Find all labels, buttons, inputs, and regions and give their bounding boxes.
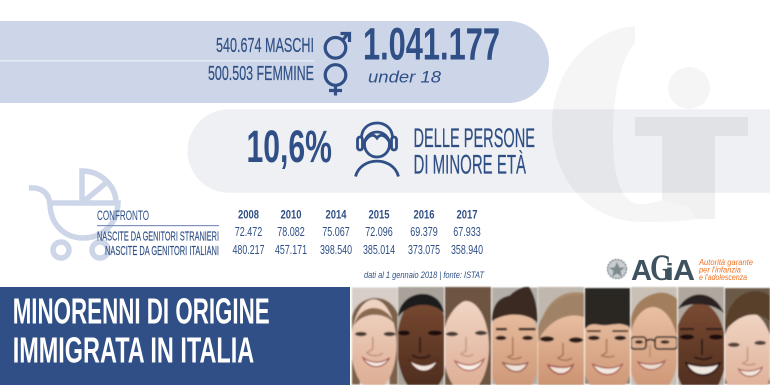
foreign-parent births values: 72.096 xyxy=(365,225,393,239)
italian-parent births values: 385.014 xyxy=(363,243,395,257)
authority name: per l'infanzia xyxy=(698,266,742,274)
year headers: 2010 xyxy=(280,208,302,222)
face 4 xyxy=(491,286,538,385)
source note: dati al 1 gennaio 2018 | fonte: ISTAT xyxy=(364,270,485,280)
females count: 500.503 FEMMINE xyxy=(208,63,314,85)
row labels xyxy=(97,228,219,258)
text: of persons under age: DELLE PERSONE xyxy=(414,123,535,153)
year headers xyxy=(238,208,478,222)
AGIA wordmark: A xyxy=(631,255,652,287)
year headers: 2008 xyxy=(238,208,259,222)
icon: female symbol xyxy=(325,65,346,96)
AGIA wordmark: A xyxy=(673,255,695,287)
foreign-parent births values: 67.933 xyxy=(453,225,481,239)
italian-parent births values: 457.171 xyxy=(275,243,307,257)
year headers: 2017 xyxy=(456,208,478,222)
foreign-parent births values xyxy=(235,225,481,239)
year headers: 2016 xyxy=(414,208,435,222)
authority name: Autorità garante xyxy=(698,258,754,267)
italian-parent births values: 480.217 xyxy=(232,243,265,257)
icon: watermark logo Gi xyxy=(552,26,748,222)
italian-parent births values xyxy=(232,243,483,257)
face 7 xyxy=(630,286,678,385)
italian-parent births values: 358.940 xyxy=(451,243,483,257)
icon: male symbol xyxy=(325,34,350,58)
logo: AGIA xyxy=(608,248,754,289)
AGIA wordmark xyxy=(631,248,695,289)
icon: republic emblem xyxy=(608,260,626,278)
foreign-parent births values: 69.379 xyxy=(410,225,438,239)
face 1 xyxy=(351,287,399,385)
face 9 xyxy=(724,287,770,385)
AGIA wordmark: i xyxy=(665,259,674,285)
panel: title band: IMMIGRATA IN ITALIA xyxy=(13,330,254,370)
foreign-parent births values: 78.082 xyxy=(277,225,305,239)
face 3 xyxy=(444,286,492,385)
panel: title band xyxy=(0,287,350,385)
icon: child with headphones xyxy=(356,123,398,176)
panel: share of minors band xyxy=(188,109,770,193)
year headers: 2014 xyxy=(326,208,347,222)
panel: total minors band xyxy=(0,18,549,103)
row labels: NASCITE DA GENITORI ITALIANI xyxy=(105,243,219,258)
italian-parent births values: 398.540 xyxy=(320,243,352,257)
table heading: CONFRONTO xyxy=(97,207,149,223)
authority name: e l'adolescenza xyxy=(699,273,747,282)
face 2 xyxy=(396,286,445,385)
row labels: NASCITE DA GENITORI STRANIERI xyxy=(97,228,219,244)
italian-parent births values: 373.075 xyxy=(408,243,440,257)
authority name xyxy=(698,258,754,282)
percentage: 10,6% xyxy=(246,121,332,172)
males count: 540.674 MASCHI xyxy=(216,35,314,57)
year headers: 2015 xyxy=(368,208,390,222)
under 18 label: under 18 xyxy=(368,68,442,86)
table: births comparison xyxy=(97,207,483,258)
foreign-parent births values: 75.067 xyxy=(322,225,350,239)
AGIA wordmark: G xyxy=(650,248,672,289)
total number: 1.041.177 xyxy=(363,18,500,70)
face 6 xyxy=(584,286,631,385)
title: MINORENNI DI ORIGINE xyxy=(13,290,270,332)
foreign-parent births values: 72.472 xyxy=(235,225,262,239)
photo strip: teenage faces xyxy=(351,287,770,385)
face 5 xyxy=(537,286,586,385)
face 8 xyxy=(677,286,725,385)
glasses xyxy=(631,337,677,349)
panel: share of minors band: DI MINORE ETÀ xyxy=(414,150,526,180)
icon: baby pram xyxy=(29,171,118,258)
